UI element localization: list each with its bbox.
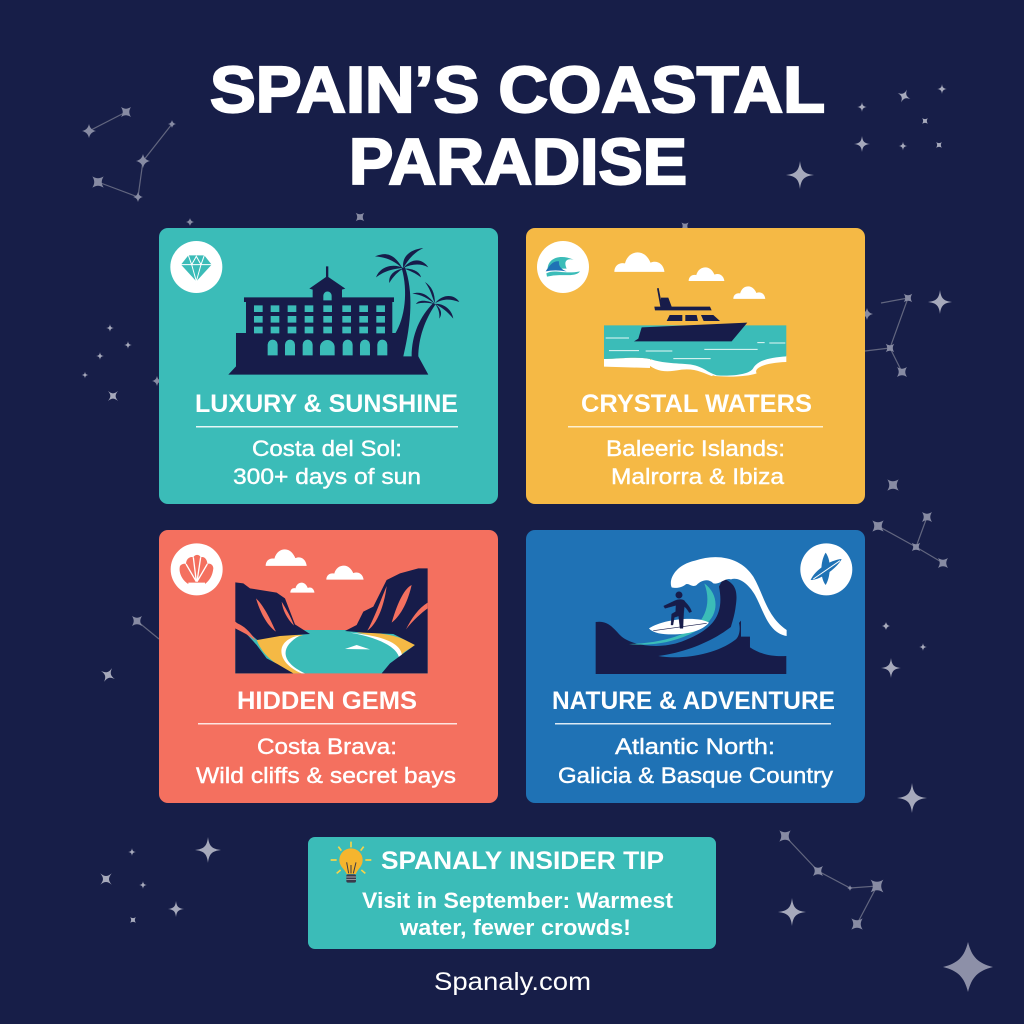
title: PARADISE [349,125,687,198]
icon: light bulb [331,842,371,883]
starry background [82,84,993,992]
title: SPAIN’S COASTAL [210,53,825,126]
panel: luxury and sunshine [159,228,498,504]
description: costa del sol [233,436,421,489]
description: costa brava: Wild cliffs & secret bays [196,763,456,788]
description: balearic islands: Baleeric Islands: [606,436,785,461]
tip text: Visit in September: Warmest [362,888,674,913]
footer: website: Spanaly.com [434,968,591,996]
heading: crystal waters: CRYSTAL WATERS [581,390,812,418]
description: costa del sol: 300+ days of sun [233,464,421,489]
icon: diamond badge [170,241,222,293]
illustration: hotel with palm trees [228,248,459,375]
panel: crystal waters [526,228,865,504]
heading: luxury and sunshine: LUXURY & SUNSHINE [195,390,458,418]
illustration: cove between cliffs [235,549,428,673]
title [210,53,825,198]
icon: wave badge [537,241,589,293]
panel: hidden gems [159,530,498,803]
heading: spanaly insider tip: SPANALY INSIDER TIP [381,847,664,875]
icon: surfboards badge [800,543,852,595]
tip text [362,888,674,940]
description: costa brava: Costa Brava: [257,734,397,759]
callout: insider tip [308,837,716,949]
description: atlantic north: Atlantic North: [615,734,775,759]
description: costa brava [196,734,456,788]
icon: shell badge [171,543,223,595]
description: balearic islands [606,436,785,489]
description: costa del sol: Costa del Sol: [252,436,402,461]
illustration: yacht on sea [604,252,786,377]
tip text: water, fewer crowds! [399,915,631,940]
heading: nature and adventure: NATURE & ADVENTURE [552,687,835,715]
description: atlantic north: Galicia & Basque Country [558,763,833,788]
illustration: surfer on a wave [596,557,787,674]
panel: nature and adventure [526,530,865,803]
description: balearic islands: Malrorra & Ibiza [611,464,785,489]
heading: hidden gems: HIDDEN GEMS [237,687,417,715]
description: atlantic north [558,734,833,788]
